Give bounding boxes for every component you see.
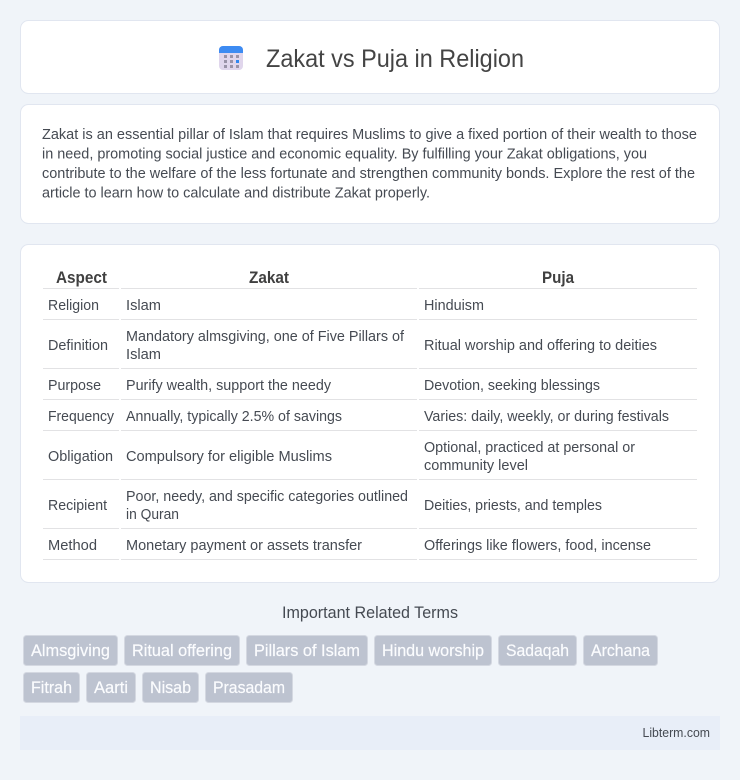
row: obligation: community level (424, 458, 528, 474)
row: frequency (43, 409, 697, 431)
text block: intro paragraph: Zakat is an essential pillar of Islam that requires Muslims to give a fixed portion of their wealth to those (42, 127, 697, 143)
text block: intro paragraph: article to learn how to calculate and distribute Zakat properly. (42, 186, 430, 202)
tag: Prasadam: Prasadam (213, 678, 285, 697)
tag: Nisab (142, 672, 198, 702)
footer (20, 716, 720, 750)
row: religion: Islam (126, 298, 161, 314)
tag: Ritual offering (124, 636, 240, 666)
tag: Almsgiving: Almsgiving (31, 641, 110, 660)
row: recipient (43, 489, 697, 529)
tag: Sadaqah: Sadaqah (506, 641, 569, 660)
panel: comparison table (20, 244, 720, 582)
row: definition: Islam (126, 347, 161, 363)
row: obligation (43, 440, 697, 480)
tag: Archana (584, 636, 658, 666)
tag: Nisab: Nisab (150, 678, 191, 697)
tag: Prasadam (206, 672, 292, 702)
tag: Hindu worship: Hindu worship (382, 641, 484, 660)
row: obligation: Obligation (48, 449, 113, 465)
tag: Fitrah: Fitrah (31, 678, 72, 697)
table header: Aspect (56, 269, 107, 287)
tag: Pillars of Islam: Pillars of Islam (254, 641, 360, 660)
row: definition (43, 329, 697, 369)
table header: Zakat (249, 269, 289, 287)
row: method (43, 538, 697, 560)
row: purpose: Purify wealth, support the needy (126, 378, 332, 394)
related term tags (24, 636, 658, 702)
tag: Almsgiving (24, 636, 118, 666)
tag: Sadaqah (498, 636, 576, 666)
row: method: Offerings like flowers, food, incense (424, 538, 651, 554)
row: obligation: Optional, practiced at personal or (424, 440, 635, 456)
row: frequency: Frequency (48, 409, 115, 425)
title: Zakat vs Puja in Religion (266, 45, 524, 73)
row: religion (43, 298, 697, 320)
row: purpose: Devotion, seeking blessings (424, 378, 600, 394)
row: definition: Mandatory almsgiving, one of Five Pillars of (126, 329, 405, 345)
row: recipient: Recipient (48, 498, 107, 514)
row: definition: Ritual worship and offering to deities (424, 338, 657, 354)
text block: intro paragraph: in need, promoting social justice and economic equality. By fulfilling your Zakat obligations, you (42, 146, 647, 162)
row: frequency: Varies: daily, weekly, or during festivals (424, 409, 669, 425)
row: purpose (43, 378, 697, 400)
panel: description (20, 104, 720, 224)
tag: Fitrah (24, 672, 80, 702)
row: recipient: in Quran (126, 507, 179, 523)
row: recipient: Poor, needy, and specific categories outlined (126, 489, 408, 505)
tag: Pillars of Islam (246, 636, 368, 666)
row: method: Monetary payment or assets transfer (126, 538, 362, 554)
icon: calendar (219, 46, 243, 70)
row: definition: Definition (48, 338, 108, 354)
footer: Libterm.com (642, 726, 710, 740)
row: recipient: Deities, priests, and temples (424, 498, 602, 514)
row: purpose: Purpose (48, 378, 101, 394)
panel: header (20, 20, 720, 94)
tag: Archana: Archana (591, 641, 651, 660)
text block: intro paragraph (42, 127, 697, 202)
tag: Aarti: Aarti (94, 678, 128, 697)
row: religion: Religion (48, 298, 99, 314)
tag: Ritual offering: Ritual offering (132, 641, 232, 660)
row: frequency: Annually, typically 2.5% of savings (126, 409, 342, 425)
table header (43, 269, 697, 289)
row: obligation: Compulsory for eligible Muslims (126, 449, 332, 465)
heading: related terms: Important Related Terms (282, 604, 458, 622)
tag: Hindu worship (374, 636, 492, 666)
row: religion: Hinduism (424, 298, 484, 314)
text block: intro paragraph: contribute to the welfare of the less fortunate and strengthen community bonds. Explore the rest of the (42, 166, 695, 182)
row: method: Method (48, 538, 97, 554)
table header: Puja (542, 269, 575, 287)
tag: Aarti (86, 672, 136, 702)
